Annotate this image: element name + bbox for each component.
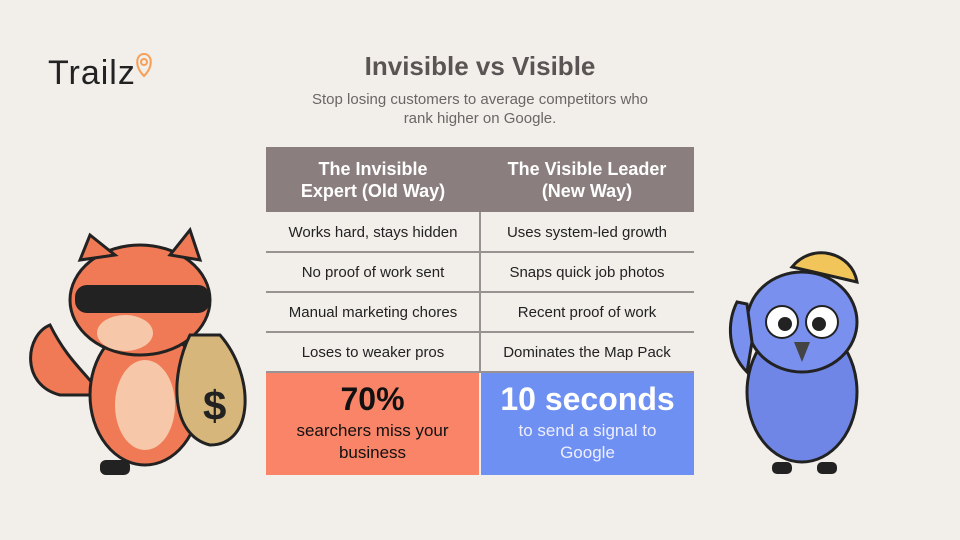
comparison table: No proof of work sent: [302, 264, 444, 280]
comparison table: Manual marketing chores: [289, 304, 457, 320]
comparison table: Recent proof of work: [518, 304, 656, 320]
stat: 70%: 70%: [340, 381, 405, 417]
comparison table: Snaps quick job photos: [509, 264, 665, 280]
header: [266, 147, 694, 212]
title: Invisible vs Visible: [365, 51, 595, 81]
stat: 70%: searchers miss your: [296, 421, 449, 440]
comparison table: Uses system-led growth: [507, 224, 667, 240]
comparison table: [266, 147, 694, 475]
stat: 10 seconds: Google: [560, 443, 615, 462]
rows: Works hard, stays hidden: [288, 224, 457, 240]
raccoon illustration: [29, 227, 247, 475]
subtitle: rank higher on Google.: [404, 110, 556, 127]
stat: 70%: business: [339, 443, 406, 462]
stat: 70%: [266, 373, 479, 475]
header: Expert (Old Way): [301, 180, 445, 200]
owl illustration: [728, 251, 859, 474]
comparison table: Loses to weaker pros: [302, 344, 444, 360]
comparison table: Dominates the Map Pack: [503, 344, 671, 360]
subtitle: [312, 91, 648, 127]
stat: 10 seconds: [481, 373, 694, 475]
subtitle: Stop losing customers to average competitors who: [312, 91, 648, 108]
stat: 10 seconds: to send a signal to: [518, 421, 656, 440]
header: The Invisible: [318, 158, 428, 178]
header: The Visible Leader: [508, 158, 666, 178]
header: (New Way): [542, 180, 632, 200]
raccoon illustration: $: [203, 382, 226, 429]
stat: 10 seconds: 10 seconds: [500, 381, 675, 417]
